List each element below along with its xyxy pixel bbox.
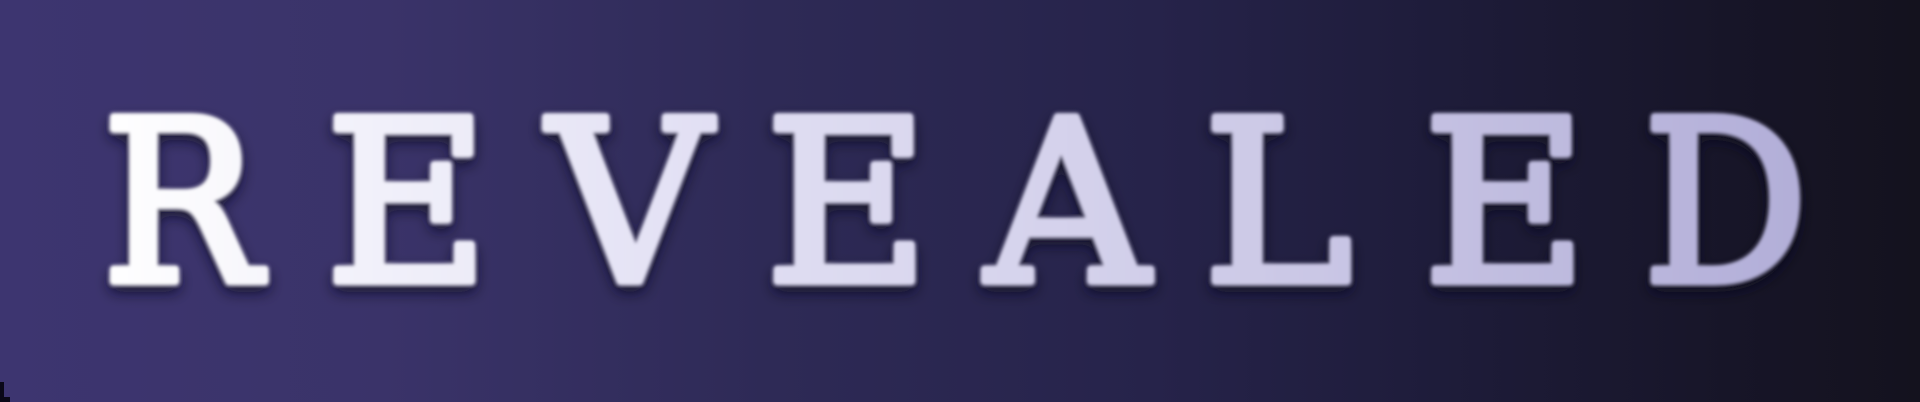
title: REVEALED: EVEALE xyxy=(325,73,1587,335)
title: REVEALED: R xyxy=(102,73,265,335)
corner mark xyxy=(0,382,10,402)
title: REVEALED: D xyxy=(1643,73,1808,335)
